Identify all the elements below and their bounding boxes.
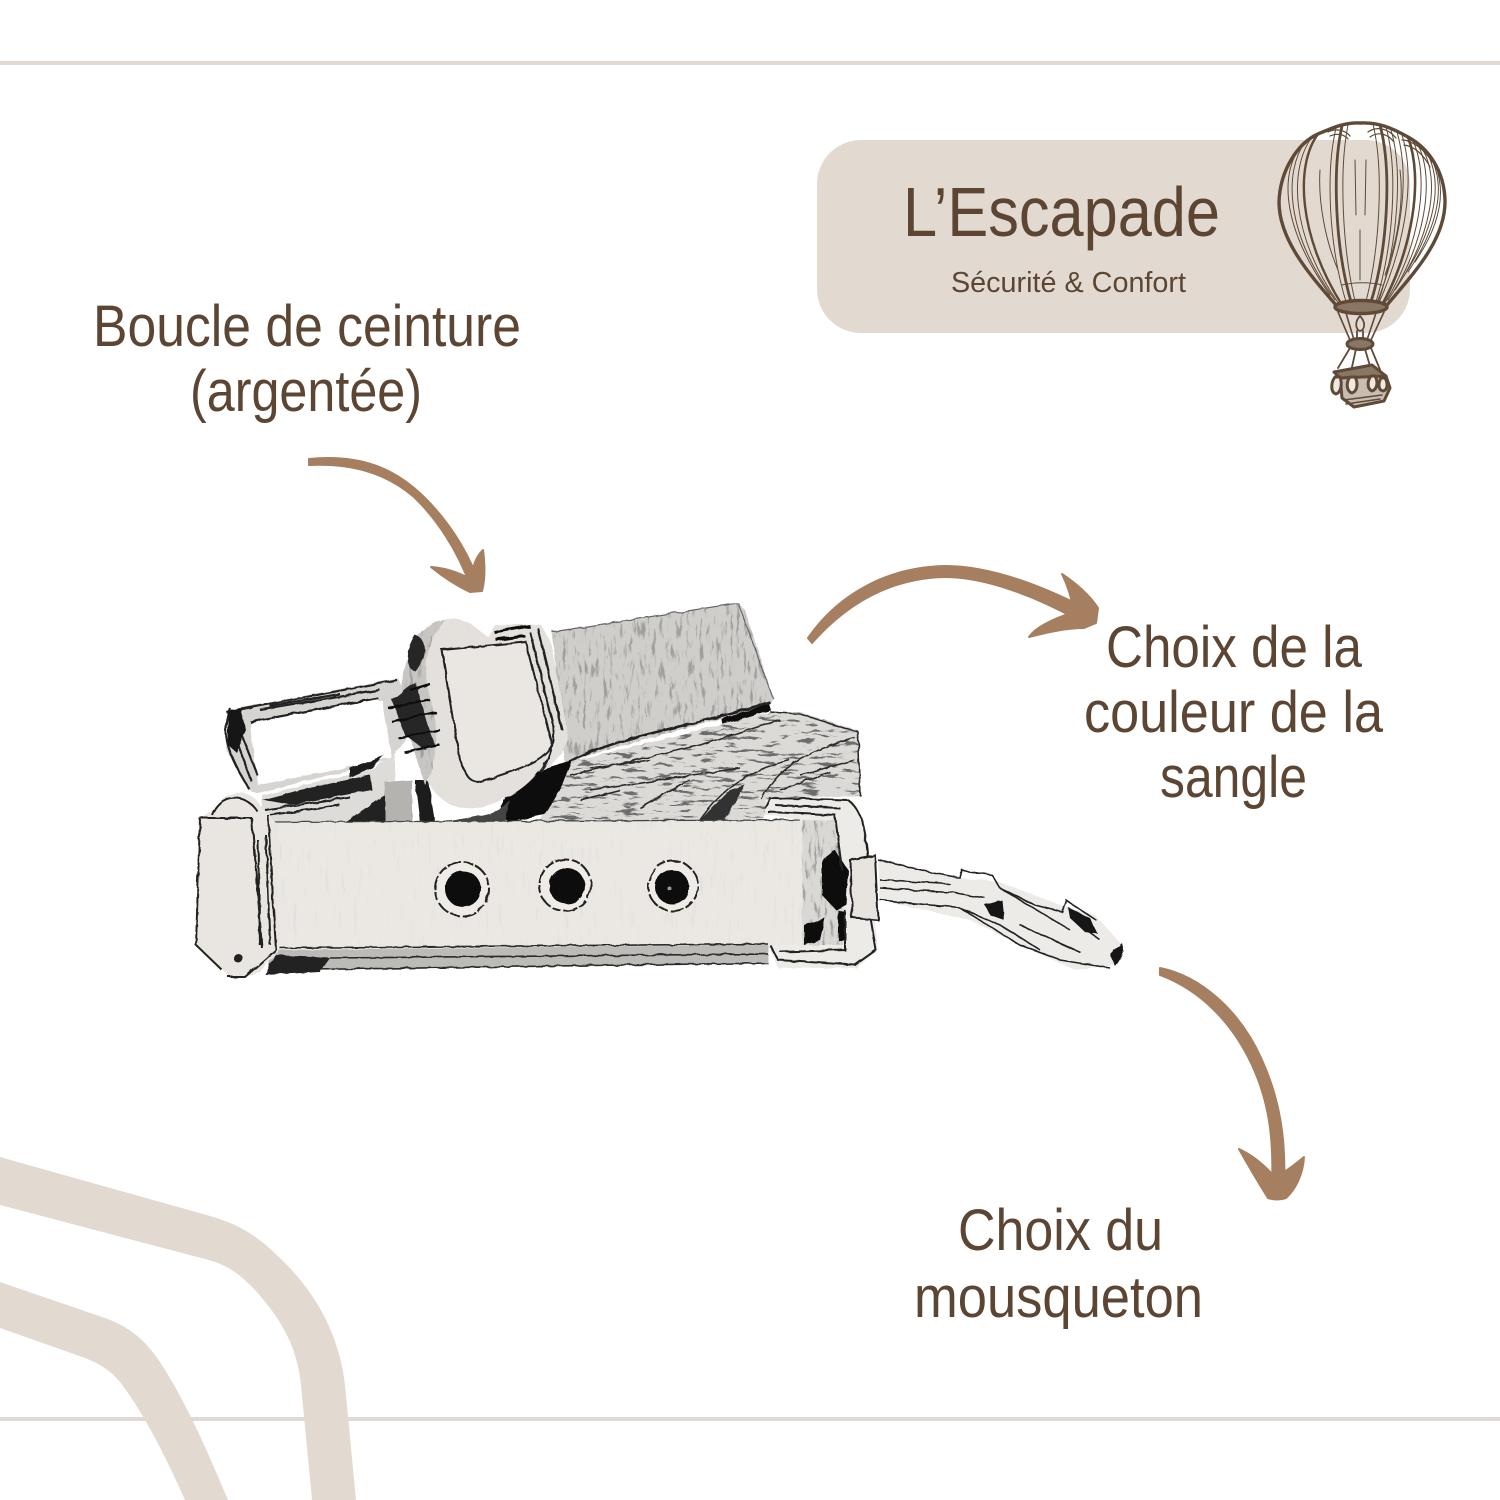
dark recess behind buckle <box>262 755 572 822</box>
decorative curved bands bottom left <box>0 1157 356 1500</box>
label: choix de la couleur de la sangle: Choix de la <box>1106 615 1363 680</box>
left strap keeper <box>196 793 280 977</box>
pill background <box>817 140 1410 333</box>
buckle frame <box>226 678 420 792</box>
eyelet 1 <box>435 862 489 916</box>
label: choix de la couleur de la sangle: couleur de la <box>1084 680 1384 745</box>
basket ropes <box>1338 348 1381 372</box>
illustration: belt strap with buckle and carabiner <box>196 603 1124 977</box>
flame <box>1356 316 1364 340</box>
basket <box>1332 365 1390 407</box>
buckle strap keeper <box>388 618 568 808</box>
front strap <box>265 820 802 975</box>
arrow to strap colour label <box>808 566 1098 643</box>
carabiner <box>850 855 1124 970</box>
upper grey strap <box>552 603 773 765</box>
lower ring <box>1347 338 1373 350</box>
label: boucle de ceinture <box>93 294 521 424</box>
label: boucle de ceinture: Boucle de ceinture <box>93 294 521 359</box>
top divider line <box>0 61 1500 65</box>
label: choix du mousqueton: Choix du <box>958 1198 1163 1263</box>
right metal ring and strap end <box>765 798 878 968</box>
arrow to buckle <box>309 458 484 592</box>
folded strap underneath <box>540 712 860 822</box>
brand subtitle: Sécurité & Confort <box>951 267 1186 299</box>
label: boucle de ceinture: (argentée) <box>190 359 422 424</box>
label: choix du mousqueton: mousqueton <box>914 1265 1203 1330</box>
arrow to carabiner label <box>1160 968 1304 1200</box>
burner ring <box>1335 300 1387 314</box>
label: choix de la couleur de la sangle: sangle <box>1160 745 1307 810</box>
bottom divider line <box>0 1417 1500 1421</box>
brand pill <box>817 140 1410 333</box>
eyelet 2 <box>539 859 591 911</box>
eyelet 3 <box>648 861 698 911</box>
label: choix du mousqueton <box>914 1198 1203 1330</box>
balloon envelope <box>1279 123 1445 305</box>
icon: hot air balloon <box>1279 123 1445 407</box>
label: choix de la couleur de la sangle <box>1084 615 1384 810</box>
burner ropes <box>1338 312 1384 340</box>
brand title: L’Escapade <box>903 173 1220 251</box>
